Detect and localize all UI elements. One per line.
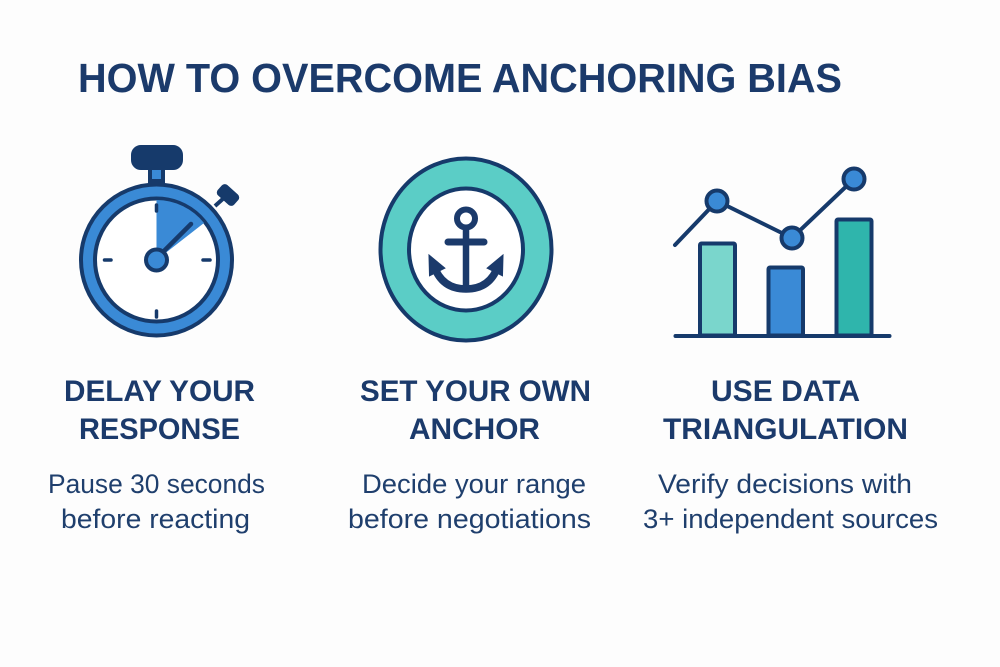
text: decide your range: Decide your range [362, 469, 586, 499]
heading: set your own anchor: ANCHOR [409, 413, 540, 446]
heading: set your own anchor [360, 375, 591, 446]
text: verify decisions [643, 469, 938, 534]
text: verify decisions: Verify decisions with [658, 469, 912, 499]
icon: anchor in ring [380, 158, 552, 340]
text: pause 30 seconds [48, 469, 265, 534]
panel: delay your response [48, 147, 265, 534]
icon: stopwatch [81, 147, 238, 336]
text: decide your range: before negotiations [348, 504, 591, 534]
text: decide your range [348, 469, 591, 534]
text: verify decisions: 3+ independent sources [643, 504, 938, 534]
heading: use data triangulation [663, 375, 908, 446]
heading: use data triangulation: USE DATA [711, 375, 860, 408]
heading: delay your response: DELAY YOUR [64, 375, 255, 408]
icon: bar and line chart [675, 168, 890, 336]
heading: use data triangulation: TRIANGULATION [663, 413, 908, 446]
heading: delay your response: RESPONSE [79, 413, 240, 446]
panel: set your own anchor [348, 158, 591, 534]
heading: delay your response [64, 375, 255, 446]
panel: use data triangulation [643, 168, 938, 534]
text: pause 30 seconds: Pause 30 seconds [48, 469, 265, 499]
title: HOW TO OVERCOME ANCHORING BIAS [78, 55, 842, 101]
heading: set your own anchor: SET YOUR OWN [360, 375, 591, 408]
text: pause 30 seconds: before reacting [61, 504, 250, 534]
